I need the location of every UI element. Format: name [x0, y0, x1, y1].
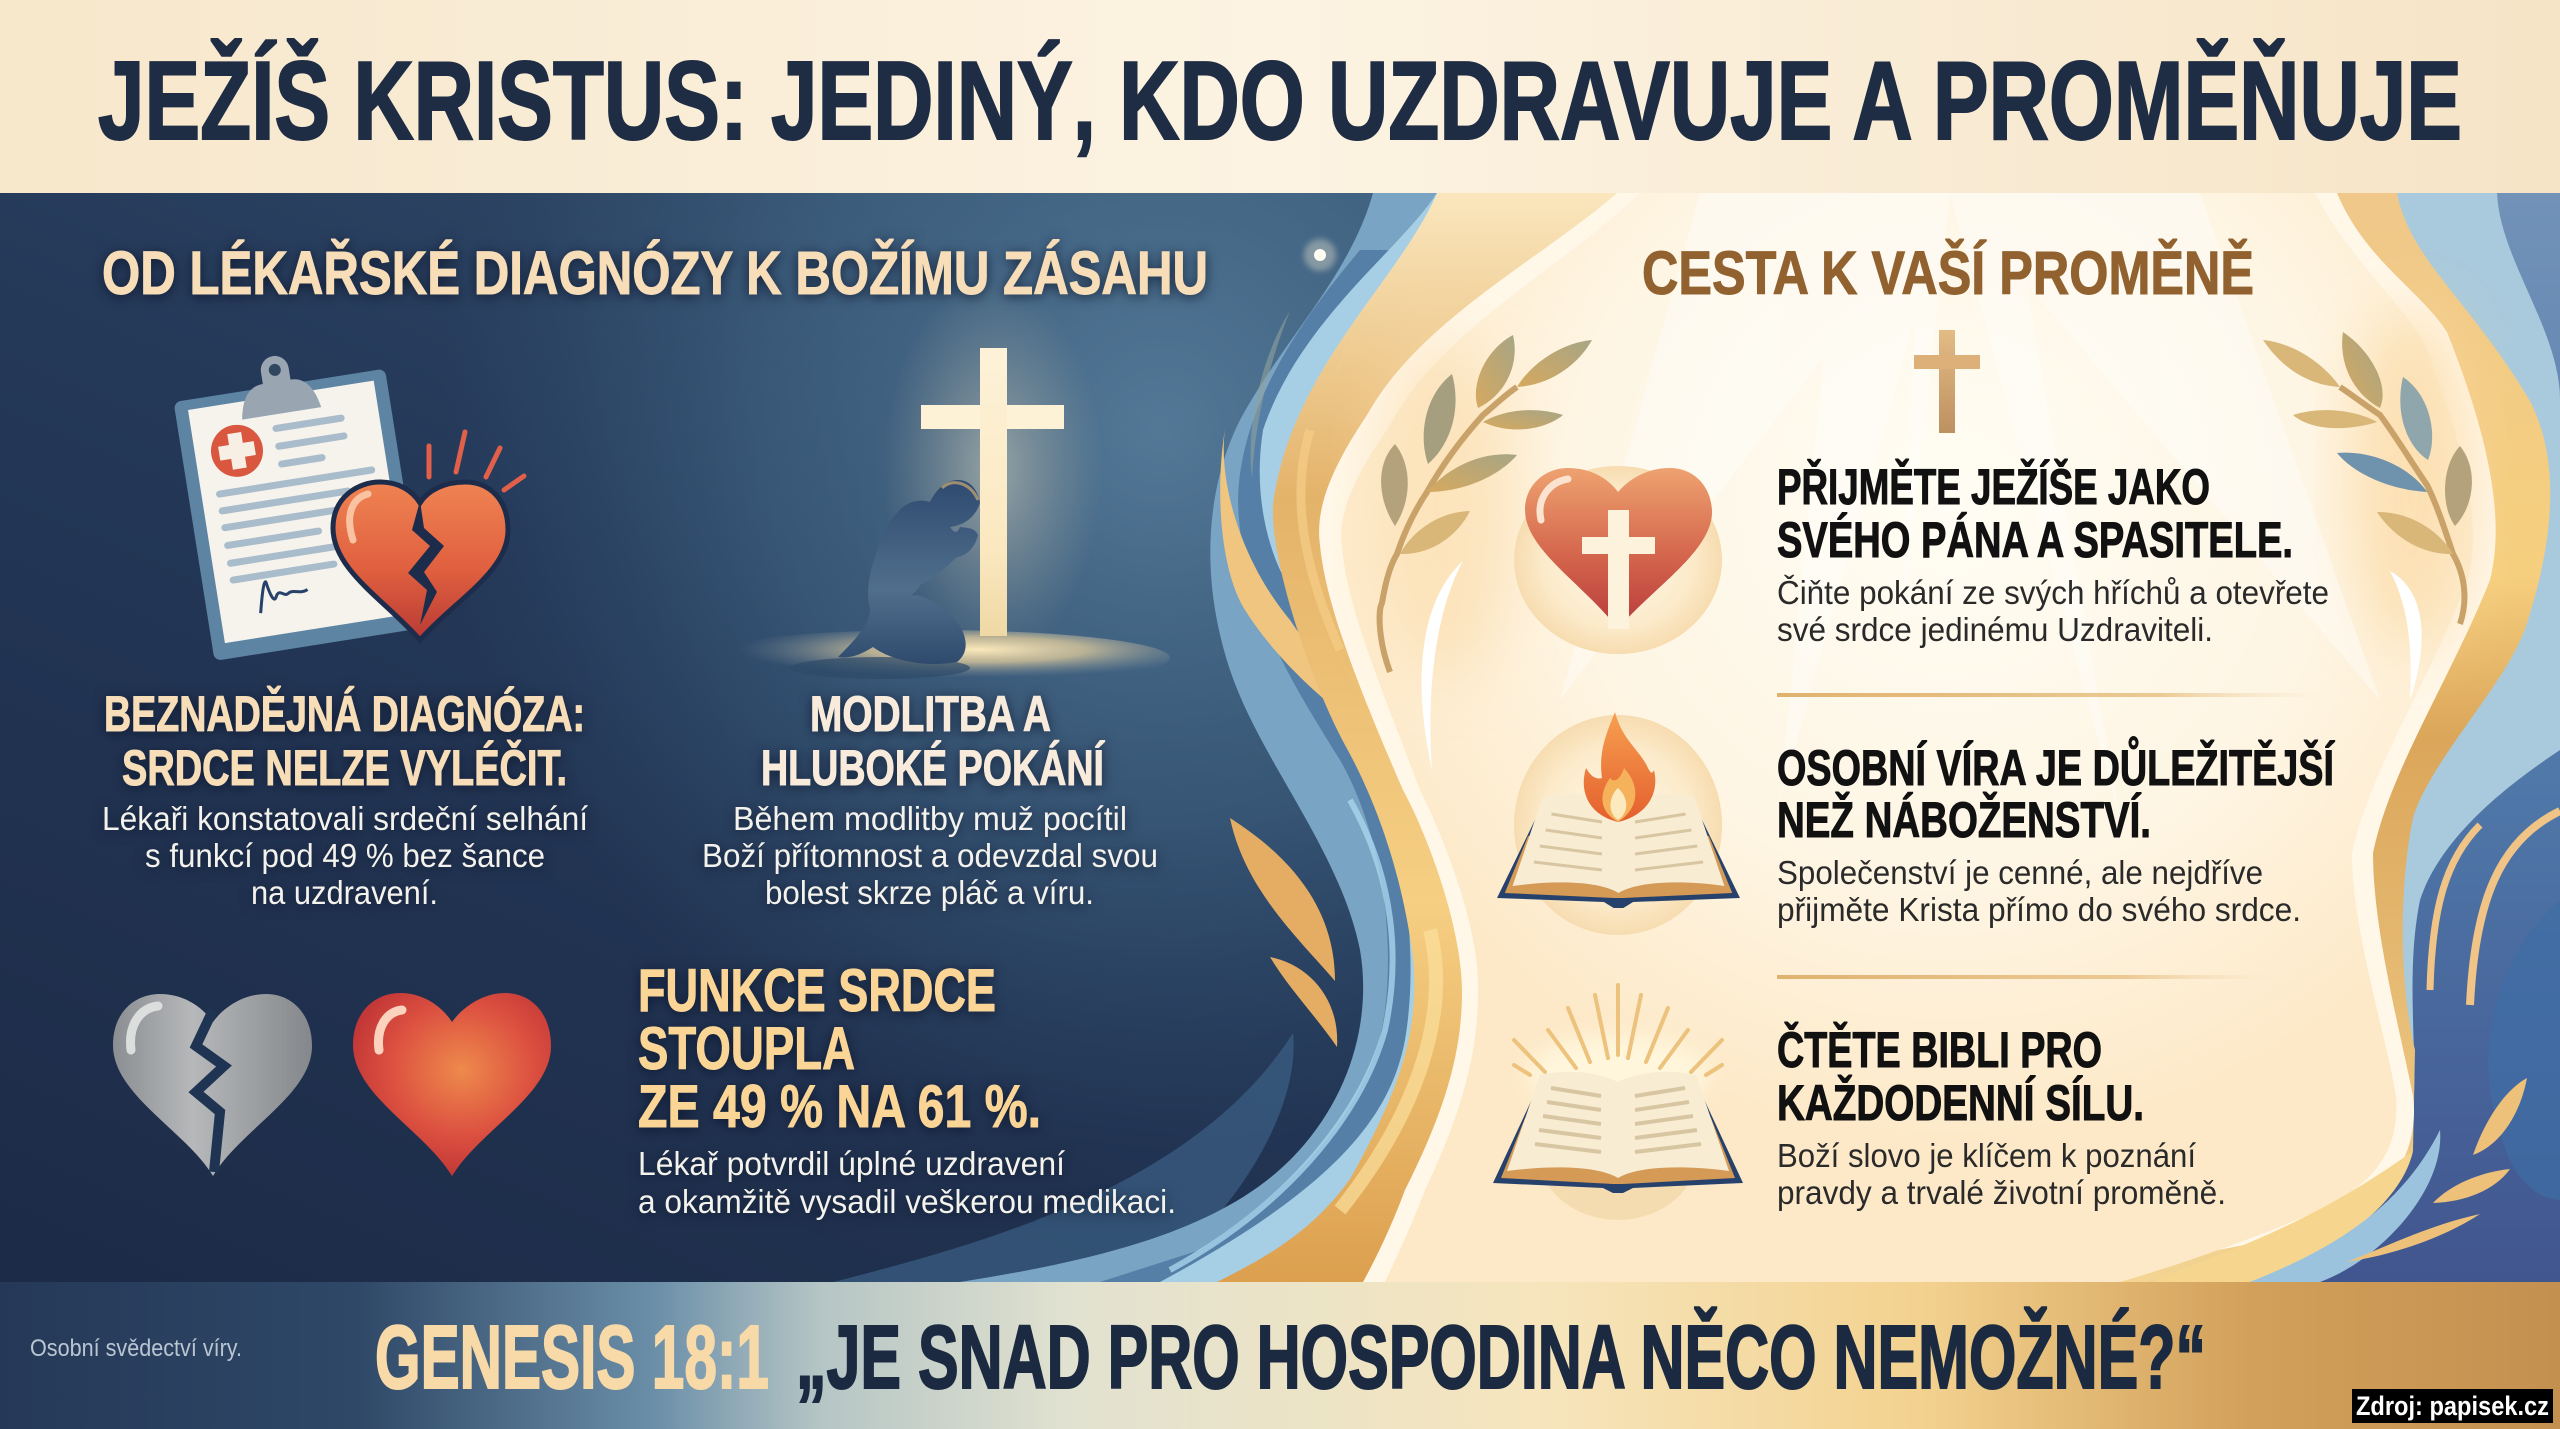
text block: personal faith — [1777, 736, 2335, 928]
text block: read the Bible: pravdy a trvalé životní proměně. — [1777, 1174, 2226, 1211]
text block: hopeless diagnosis: SRDCE NELZE VYLÉČIT. — [122, 739, 567, 796]
text block: heart function result: ZE 49 % NA 61 %. — [638, 1073, 1041, 1140]
text block: personal faith: NEŽ NÁBOŽENSTVÍ. — [1777, 792, 2151, 848]
text block: hopeless diagnosis: BEZNADĚJNÁ DIAGNÓZA: — [104, 686, 585, 742]
text block: heart function result — [638, 957, 1176, 1220]
text block: accept Jesus — [1777, 458, 2329, 648]
text block: prayer and repentance: MODLITBA A — [810, 686, 1051, 742]
panel: background waves — [0, 193, 2560, 1282]
verse reference: GENESIS 18:1 — [375, 1308, 769, 1408]
caption: Osobní svědectví víry. — [30, 1335, 242, 1362]
text block: read the Bible: KAŽDODENNÍ SÍLU. — [1777, 1075, 2144, 1131]
icon: man praying at cross — [690, 280, 1170, 686]
icon: open Bible with rays — [1493, 985, 1743, 1220]
heading: right section: CESTA K VAŠÍ PROMĚNĚ — [1642, 239, 2254, 307]
text block: prayer and repentance — [702, 686, 1158, 911]
icon: clipboard with diagnosis — [169, 339, 426, 661]
icon: heart with cross — [1514, 466, 1722, 654]
right bottom leaves — [2347, 1078, 2527, 1262]
text block: heart function result: FUNKCE SRDCE — [638, 957, 996, 1024]
text block: accept Jesus: Čiňte pokání ze svých hříchů a otevřete — [1777, 574, 2329, 611]
text block: read the Bible: Boží slovo je klíčem k poznání — [1777, 1137, 2196, 1174]
text block: accept Jesus: PŘIJMĚTE JEŽÍŠE JAKO — [1777, 458, 2210, 515]
text block: heart function result: a okamžitě vysadil veškerou medikaci. — [638, 1183, 1176, 1220]
text block: heart function result: Lékař potvrdil úplné uzdravení — [638, 1145, 1065, 1182]
text block: personal faith: přijměte Krista přímo do svého srdce. — [1777, 891, 2301, 928]
text block: prayer and repentance: HLUBOKÉ POKÁNÍ — [761, 740, 1105, 796]
text block: hopeless diagnosis: na uzdravení. — [251, 874, 438, 911]
left orange leaves — [1230, 311, 1337, 1047]
icon: right laurel branch — [2263, 332, 2472, 624]
icon: healed red heart — [353, 993, 551, 1176]
panel: cream path area — [1319, 193, 2496, 1282]
panel: bottom verse band — [0, 1282, 2560, 1429]
text block: heart function result: STOUPLA — [638, 1015, 855, 1082]
text block: prayer and repentance: Boží přítomnost a odevzdal svou — [702, 837, 1158, 874]
text block: read the Bible: ČTĚTE BIBLI PRO — [1777, 1021, 2102, 1078]
text block: prayer and repentance: bolest skrze pláč a víru. — [765, 874, 1094, 911]
text block: read the Bible — [1777, 1021, 2226, 1211]
text block: hopeless diagnosis: s funkcí pod 49 % bez šance — [145, 837, 545, 874]
heading: left section: OD LÉKAŘSKÉ DIAGNÓZY K BOŽÍMU ZÁSAHU — [102, 239, 1208, 307]
panel: title band — [0, 0, 2560, 193]
text block: hopeless diagnosis: Lékaři konstatovali srdeční selhání — [102, 800, 588, 837]
text block: accept Jesus: své srdce jedinému Uzdraviteli. — [1777, 611, 2213, 648]
icon: grey broken heart — [113, 994, 312, 1176]
text block: personal faith: OSOBNÍ VÍRA JE DŮLEŽITĚJŠÍ — [1777, 736, 2335, 796]
text block: accept Jesus: SVÉHO PÁNA A SPASITELE. — [1777, 512, 2293, 568]
sparkle — [1304, 239, 1336, 271]
text block: prayer and repentance: Během modlitby muž pocítil — [733, 800, 1127, 837]
icon: left laurel branch — [1380, 335, 1592, 672]
icon: book with flame — [1497, 712, 1740, 935]
icon: small gold cross — [1914, 330, 1980, 433]
text block: personal faith: Společenství je cenné, ale nejdříve — [1777, 854, 2263, 891]
text block: hopeless diagnosis — [102, 686, 588, 911]
icon: broken heart — [333, 432, 524, 640]
